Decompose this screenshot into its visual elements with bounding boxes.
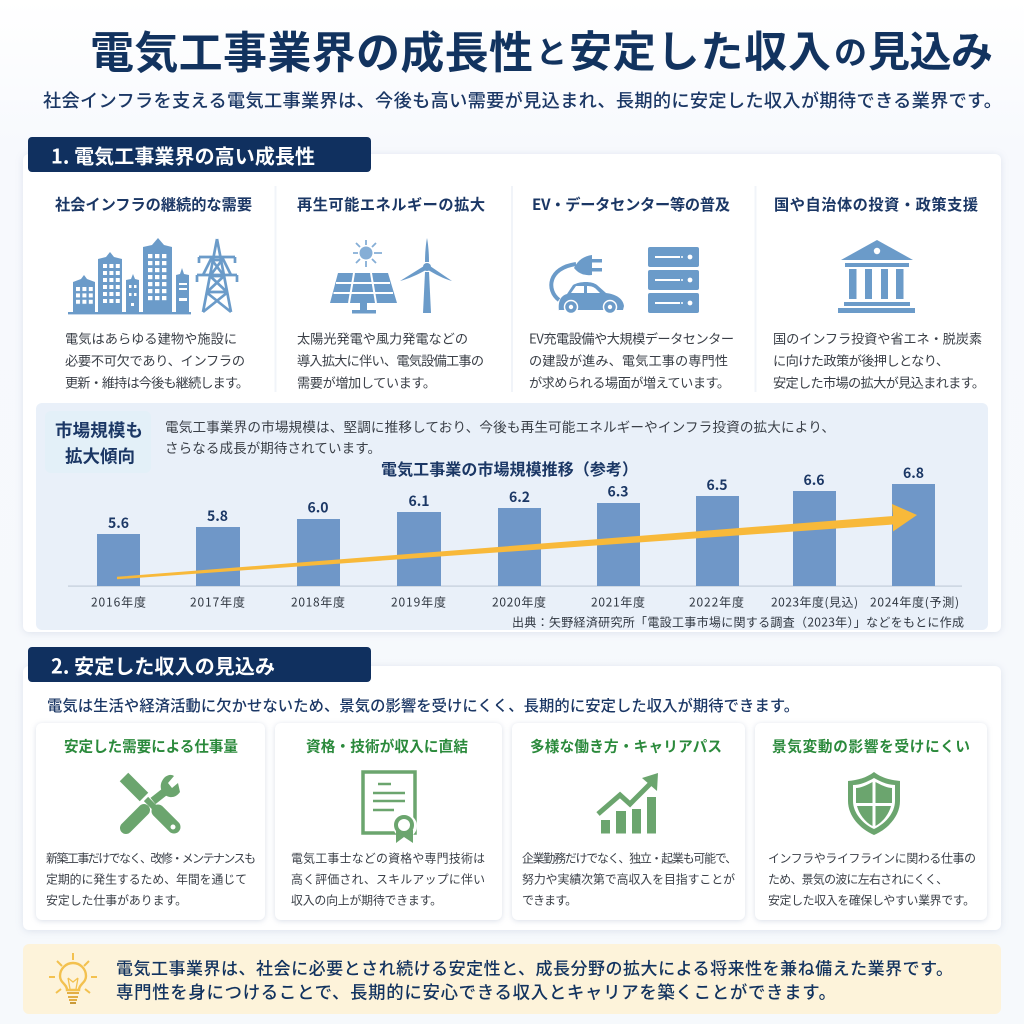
icon: light bulb	[49, 953, 97, 1003]
card: diverse careers: 企業勤務だけでなく、独立・起業も可能で、	[522, 850, 737, 866]
panel: section 2 stable income	[23, 647, 1001, 930]
title: 見込み	[868, 18, 993, 80]
callout: market trend label: 市場規模も	[55, 418, 143, 442]
bar chart: market size trend: 6.6	[803, 470, 825, 490]
column: EV and data centers: EV・データセンター等の普及	[532, 193, 730, 215]
column: EV and data centers: が求められる場面が増えています。	[529, 372, 730, 392]
column: renewable energy	[297, 193, 485, 392]
lead text: 電気は生活や経済活動に欠かせないため、景気の影響を受けにくく、長期的に安定した収入が期待できます。	[47, 694, 799, 716]
bar chart: market size trend: 5.6	[108, 513, 129, 533]
bar chart: market size trend: 2021年度	[591, 594, 645, 610]
callout: market trend label	[45, 411, 151, 473]
card: diverse careers: できます。	[522, 892, 577, 908]
card: recession resilience: ため、景気の波に左右されにくく、	[768, 870, 948, 888]
column: infrastructure demand	[55, 193, 252, 392]
column: infrastructure demand: 更新・維持は今後も継続します。	[65, 372, 249, 392]
icon: city buildings and power tower	[68, 238, 237, 314]
text: market description: 電気工事業界の市場規模は、堅調に推移しており、今後も再生可能エネルギーやインフラ投資の拡大により、	[165, 416, 835, 436]
icon: sun, solar panel and wind turbine	[330, 238, 452, 314]
card: recession resilience: インフラやライフラインに関わる仕事の	[768, 850, 976, 866]
heading: section 2: 2. 安定した収入の見込み	[51, 650, 275, 680]
text: conclusion: 電気工事業界は、社会に必要とされ続ける安定性と、成長分野の拡大による将来性を兼ね備えた業界です。	[116, 954, 953, 980]
column: renewable energy: 再生可能エネルギーの拡大	[297, 193, 485, 215]
card: recession resilience: 景気変動の影響を受けにくい	[772, 736, 970, 756]
text: conclusion: 専門性を身につけることで、長期的に安心できる収入とキャリアを築くことができます。	[116, 980, 836, 1004]
card: diverse careers	[512, 723, 745, 920]
column: renewable energy: 導入拡大に伴い、電気設備工事の	[297, 350, 484, 370]
bar chart: market size trend	[68, 456, 962, 610]
text: market description: さらなる成長が期待されています。	[165, 437, 381, 457]
bar chart: market size trend: 2016年度	[91, 594, 146, 610]
text: market description	[165, 416, 835, 457]
panel: section 1 growth	[23, 137, 1001, 632]
bar chart: market size trend: 6.5	[706, 475, 728, 495]
card: recession resilience	[755, 723, 987, 920]
card: recession resilience: 安定した収入を確保しやすい業界です。	[768, 892, 975, 908]
card: stable workload: 安定した仕事があります。	[46, 892, 187, 908]
arrow: upward trend	[117, 504, 917, 579]
bar chart: market size trend: 2023年度(見込)	[771, 594, 858, 610]
chart title: 電気工事業の市場規模推移（参考）	[381, 456, 638, 480]
heading: section 1	[28, 137, 371, 172]
title: と	[536, 28, 567, 72]
subtitle: 社会インフラを支える電気工事業界は、今後も高い需要が見込まれ、長期的に安定した収入が期待できる業界です。	[43, 87, 1002, 113]
bar chart: market size trend: 6.2	[509, 487, 530, 507]
heading: section 1: 1. 電気工事業界の高い成長性	[51, 140, 315, 170]
bar chart: market size trend: 6.8	[903, 463, 924, 483]
icon: wrench and screwdriver	[124, 775, 180, 830]
icon: electric car with plug	[551, 255, 624, 314]
bar chart: market size trend: 2019年度	[391, 594, 446, 610]
bar chart: market size trend: 2022年度	[689, 594, 744, 610]
column: infrastructure demand: 電気はあらゆる建物や施設に	[65, 328, 237, 348]
title: の	[834, 26, 867, 74]
card: qualifications: 資格・技術が収入に直結	[306, 736, 468, 756]
bar chart: market size trend: 6.0	[307, 498, 329, 518]
column: renewable energy: 需要が増加しています。	[297, 372, 436, 392]
source note: 出典：矢野経済研究所「電設工事市場に関する調査（2023年）」などをもとに作成	[512, 614, 964, 630]
icon: rising bar chart with arrow	[598, 773, 658, 834]
icon: server rack	[648, 247, 699, 313]
card: qualifications	[275, 723, 502, 920]
title: 電気工事業界の成長性	[90, 17, 533, 81]
column: government investment: 安定した市場の拡大が見込まれます。	[773, 372, 985, 392]
card: qualifications: 収入の向上が期待できます。	[291, 892, 442, 908]
icon: shield	[848, 772, 900, 835]
bar chart: market size trend: 5.8	[207, 506, 228, 526]
card: qualifications: 高く評価され、スキルアップに伴い	[291, 870, 485, 888]
column: government investment: 国のインフラ投資や省エネ・脱炭素	[773, 328, 982, 348]
bar chart: market size trend: 2017年度	[190, 594, 245, 610]
panel: market size	[36, 403, 988, 630]
bar chart: market size trend: 6.3	[607, 482, 629, 502]
column: EV and data centers: の建設が進み、電気工事の専門性	[529, 350, 728, 370]
card: diverse careers: 多様な働き方・キャリアパス	[530, 736, 722, 756]
text: conclusion	[116, 954, 953, 1004]
title	[90, 17, 993, 81]
callout: conclusion	[23, 944, 1001, 1014]
card: qualifications: 電気工事士などの資格や専門技術は	[291, 850, 485, 866]
column: government investment	[773, 193, 985, 392]
column: EV and data centers: EV充電設備や大規模データセンター	[529, 328, 734, 348]
callout: market trend label: 拡大傾向	[65, 444, 135, 468]
bar chart: market size trend: 2018年度	[291, 594, 345, 610]
column: government investment: 国や自治体の投資・政策支援	[774, 193, 978, 215]
column: renewable energy: 太陽光発電や風力発電などの	[297, 328, 468, 348]
heading: section 2	[28, 647, 371, 682]
column: infrastructure demand: 必要不可欠であり、インフラの	[65, 350, 245, 370]
card: stable workload	[36, 723, 265, 920]
icon: government building	[838, 240, 915, 313]
icon: certificate with ribbon	[363, 772, 417, 843]
card: stable workload: 安定した需要による仕事量	[64, 736, 238, 756]
card: stable workload: 定期的に発生するため、年間を通じて	[46, 870, 247, 888]
card: stable workload: 新築工事だけでなく、改修・メンテナンスも	[46, 850, 256, 866]
title: 安定した収入	[569, 18, 831, 80]
bar chart: market size trend: 2020年度	[492, 594, 546, 610]
column: infrastructure demand: 社会インフラの継続的な需要	[55, 193, 252, 215]
card: diverse careers: 努力や実績次第で高収入を目指すことが	[522, 870, 735, 888]
bar chart: market size trend: 2024年度(予測)	[870, 594, 959, 610]
column: government investment: に向けた政策が後押しとなり、	[773, 350, 949, 370]
column: EV and data centers	[529, 193, 734, 392]
bar chart: market size trend: 6.1	[408, 491, 430, 511]
